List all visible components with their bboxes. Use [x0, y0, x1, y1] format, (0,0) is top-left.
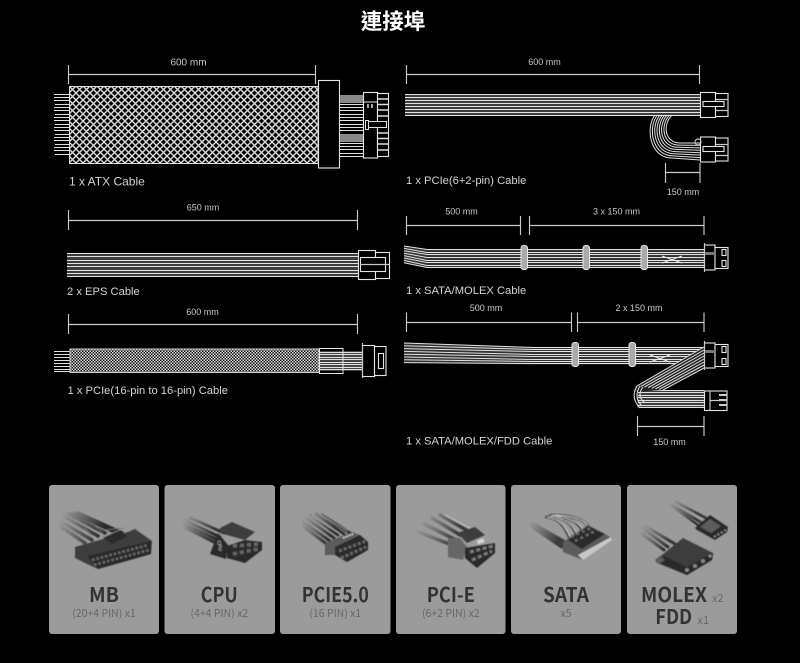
dimension: FDD branch 150 mm [638, 416, 704, 447]
EPS label: 2 x EPS Cable [67, 286, 140, 298]
dimension: PCIe branch 150 mm [666, 163, 700, 197]
icon: MB connector [60, 513, 152, 569]
dimension: SATA 500 mm [406, 206, 520, 235]
dimension: SATA 3 x 150 mm [530, 206, 704, 235]
icon: MOLEX connector [641, 526, 713, 575]
ATX label: 1 x ATX Cable [69, 174, 145, 188]
dimension: EPS 650 mm [68, 202, 358, 230]
dimension: PCIe branch 150 mm: 150 mm [667, 187, 699, 197]
EPS wires [67, 253, 358, 277]
SATA connector [704, 243, 728, 272]
dimension: FDD branch 150 mm: 150 mm [653, 437, 686, 447]
MB pin count: (20+4 PIN) x1 [72, 606, 136, 621]
16-pin label: 1 x PCIe(16-pin to 16-pin) Cable [68, 385, 228, 397]
dimension: FDD 500 mm: 500 mm [470, 303, 502, 313]
SATA wires [404, 246, 704, 268]
MB label: MB [89, 579, 119, 608]
panel: SATA/MOLEX/FDD cable [404, 303, 728, 448]
dimension: FDD 2 x 150 mm [578, 303, 704, 332]
ATX braided sleeve [70, 86, 318, 164]
dimension: FDD 500 mm [406, 303, 572, 332]
ATX output wires [340, 95, 363, 156]
dimension: SATA 500 mm: 500 mm [445, 206, 478, 216]
icon: CPU connector: CPU [215, 540, 223, 552]
SATA clips [521, 246, 648, 270]
16-pin collar and wires [320, 348, 362, 374]
EPS connector [358, 250, 390, 280]
icon: FDD connector [669, 502, 728, 540]
CPU label: CPU [201, 579, 238, 608]
FDD label: 1 x SATA/MOLEX/FDD Cable [406, 436, 552, 448]
icon: CPU connector [184, 518, 262, 563]
FDD clips [572, 342, 636, 366]
FDD label: x1 [698, 612, 709, 628]
dimension: SATA 3 x 150 mm: 3 x 150 mm [593, 206, 640, 216]
PCIe curved wires [650, 115, 700, 160]
panel: ATX cable [54, 58, 388, 188]
SATA count: x5 [560, 606, 572, 621]
panel: PCIe 16-pin cable [54, 307, 386, 397]
16-pin braided sleeve [70, 349, 319, 372]
card: PCIE5.0 [280, 485, 390, 634]
CPU pin count: (4+4 PIN) x2 [190, 606, 248, 621]
FDD folded diagonal wires [633, 347, 704, 408]
FDD main wires [404, 343, 704, 364]
icon: PCI-E connector [418, 515, 495, 568]
PCIE5.0 pin count: (16 PIN) x1 [309, 606, 361, 621]
dimension: ATX 600 mm [68, 58, 316, 84]
PCIE5.0 label: PCIE5.0 [302, 579, 369, 608]
PCIe label: 1 x PCIe(6+2-pin) Cable [406, 175, 526, 187]
SATA label: 1 x SATA/MOLEX Cable [406, 285, 526, 297]
card: CPU [164, 485, 275, 634]
16-pin connector [362, 343, 386, 378]
icon: PCIE5.0 connector [303, 514, 368, 562]
SATA label: SATA [543, 579, 589, 608]
panel: EPS cable [67, 202, 390, 298]
icon: SATA connector [532, 515, 612, 560]
dimension: PCIe 600 mm [406, 57, 700, 84]
dimension: EPS 650 mm: 650 mm [187, 202, 219, 212]
PCI-E pin count: (6+2 PIN) x2 [422, 606, 480, 621]
ATX collar [318, 80, 340, 168]
MOLEX label: x2 [712, 590, 724, 606]
FDD label: FDD [655, 601, 692, 630]
ATX connector [364, 92, 388, 158]
card: SATA [511, 485, 621, 634]
MOLEX label: MOLEX [641, 579, 707, 608]
PCI-E label: PCI-E [427, 579, 475, 608]
FDD lower connector [704, 391, 727, 410]
card: MOLEX and FDD [627, 485, 737, 634]
dimension: ATX 600 mm: 600 mm [170, 58, 207, 68]
dimension: PCIe 600 mm: 600 mm [528, 57, 561, 67]
card: PCI-E [396, 485, 506, 634]
card: MB [49, 485, 159, 634]
PCIe main wires [405, 94, 700, 116]
panel: PCIe 6+2-pin cable [405, 57, 728, 197]
dimension: 16-pin 600 mm [68, 307, 358, 334]
PCIe main connector [700, 92, 728, 118]
panel: SATA/MOLEX cable [404, 206, 728, 297]
dimension: 16-pin 600 mm: 600 mm [186, 307, 219, 317]
FDD lower wires [637, 390, 704, 408]
16-pin loose wires [54, 352, 70, 372]
ATX loose wires [54, 94, 69, 154]
dimension: FDD 2 x 150 mm: 2 x 150 mm [615, 303, 663, 313]
PCIe branch connector [695, 137, 728, 162]
title: 連接埠 [361, 10, 425, 34]
FDD upper connector [704, 341, 728, 370]
